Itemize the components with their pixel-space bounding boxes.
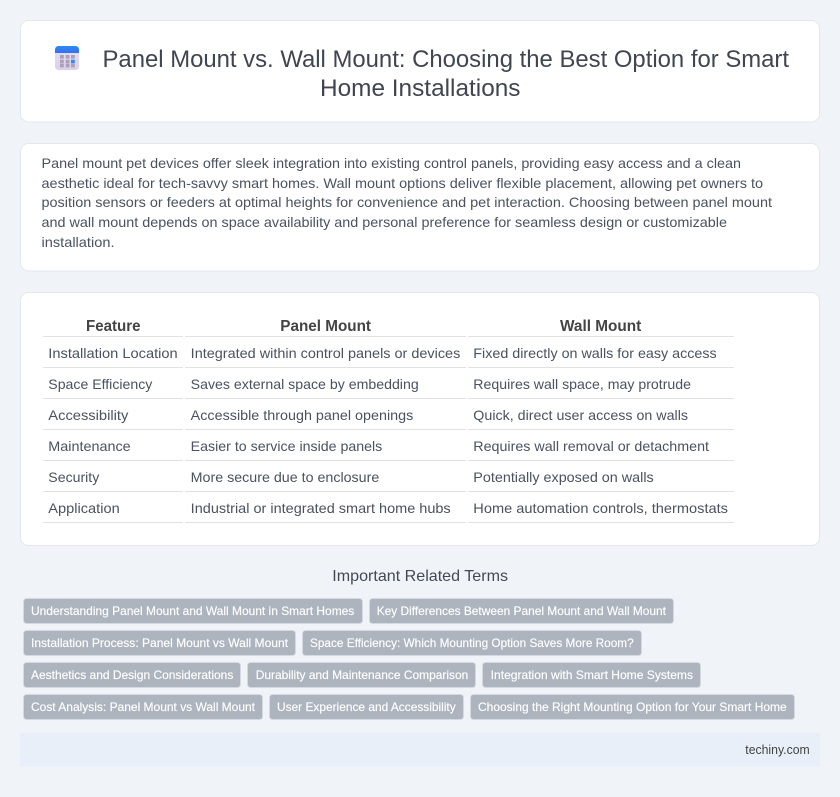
row: security: More secure due to enclosure [191, 469, 380, 485]
row: application: Home automation controls, thermostats [473, 500, 728, 516]
row: space efficiency: Saves external space by embedding [191, 376, 419, 392]
tag: Aesthetics and Design Considerations [31, 668, 233, 682]
text block: description [42, 155, 772, 250]
table header: Feature [86, 318, 141, 335]
row: maintenance: Easier to service inside panels [191, 438, 382, 454]
row: installation location: Installation Location [48, 345, 178, 361]
table header: Wall Mount [560, 318, 642, 335]
tag: Installation Process: Panel Mount vs Wall Mount [31, 636, 289, 650]
title: Home Installations [320, 75, 520, 102]
row: maintenance [48, 438, 709, 454]
tag: Integration with Smart Home Systems [491, 668, 693, 682]
text block: description: Panel mount pet devices offer sleek integration into existing control panels, providing easy access and a clean [42, 155, 741, 171]
footer [20, 733, 820, 767]
text block: description: and wall mount depends on space availability and personal preference for seamless design or customizable [42, 214, 727, 230]
tag [370, 598, 674, 624]
row: accessibility: Accessible through panel openings [191, 407, 413, 423]
row: accessibility [48, 407, 688, 423]
tag [482, 662, 700, 688]
row: space efficiency: Requires wall space, may protrude [473, 376, 691, 392]
row: space efficiency: Space Efficiency [48, 376, 152, 392]
tag: Cost Analysis: Panel Mount vs Wall Mount [31, 700, 256, 714]
heading: important related terms: Important Related Terms [332, 568, 508, 585]
row: installation location [48, 345, 717, 361]
row: maintenance: Requires wall removal or detachment [473, 438, 709, 454]
text block: description: installation. [42, 234, 114, 250]
row: security [48, 469, 654, 485]
tag: Space Efficiency: Which Mounting Option Saves More Room? [310, 636, 634, 650]
footer: techiny.com [745, 742, 810, 757]
row: accessibility: Quick, direct user access on walls [473, 407, 688, 423]
tag [24, 598, 362, 624]
text block: description: position sensors or feeders at optimal heights for convenience and pet interaction. Choosing between panel mount [42, 194, 772, 210]
row: installation location: Fixed directly on walls for easy access [473, 345, 717, 361]
tag [24, 662, 240, 688]
row: security: Potentially exposed on walls [473, 469, 654, 485]
text block: description: aesthetic ideal for tech-savvy smart homes. Wall mount options deliver flexible placement, allowing pet owners to [42, 175, 763, 191]
row: accessibility: Accessibility [48, 407, 128, 423]
tag: Key Differences Between Panel Mount and Wall Mount [377, 604, 667, 618]
tag: Understanding Panel Mount and Wall Mount in Smart Homes [31, 604, 354, 618]
row: maintenance: Maintenance [48, 438, 131, 454]
panel: comparison table [20, 292, 820, 546]
icon: calendar [55, 46, 79, 70]
tag [302, 630, 642, 656]
row: application: Industrial or integrated smart home hubs [191, 500, 451, 516]
tag: User Experience and Accessibility [277, 700, 456, 714]
row: security: Security [48, 469, 99, 485]
table header: Panel Mount [280, 318, 372, 335]
row: space efficiency [48, 376, 691, 392]
row: application: Application [48, 500, 120, 516]
tag [24, 630, 296, 656]
panel: header [20, 20, 820, 122]
title [102, 46, 789, 102]
tag [470, 694, 794, 720]
title: Panel Mount vs. Wall Mount: Choosing the Best Option for Smart [102, 46, 789, 73]
tag [270, 694, 464, 720]
panel: intro text [20, 144, 820, 271]
row: application [48, 500, 728, 516]
tag [24, 694, 262, 720]
tag: Durability and Maintenance Comparison [256, 668, 468, 682]
panel: related term tags [24, 598, 794, 720]
row: installation location: Integrated within control panels or devices [191, 345, 460, 361]
table header [86, 318, 642, 335]
tag: Choosing the Right Mounting Option for Your Smart Home [478, 700, 787, 714]
tag [248, 662, 476, 688]
